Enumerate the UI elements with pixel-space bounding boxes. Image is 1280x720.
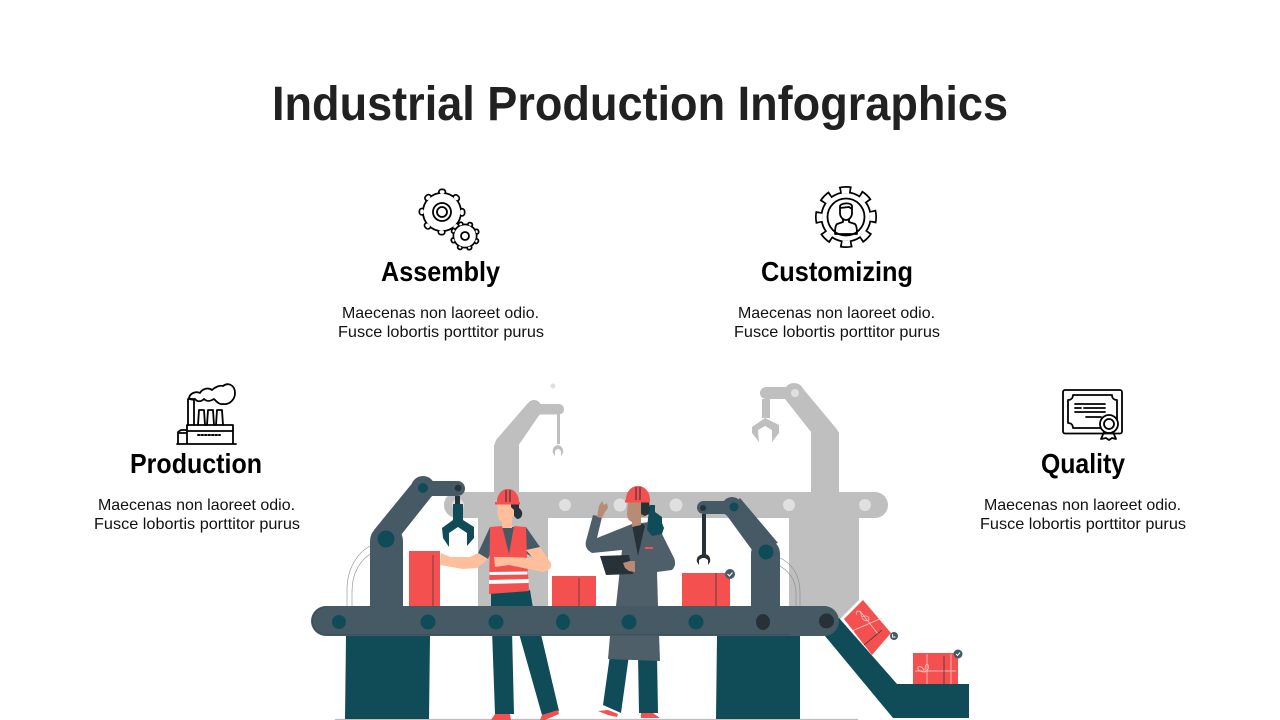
text: production description bbox=[94, 497, 300, 533]
text: quality description bbox=[980, 497, 1186, 533]
vest bbox=[489, 526, 529, 594]
shoes bbox=[598, 710, 660, 718]
left robot arm with claw bbox=[370, 476, 474, 606]
tablet bbox=[600, 555, 633, 575]
face bbox=[627, 501, 645, 527]
hair bbox=[511, 503, 522, 519]
worker: woman with tablet bbox=[586, 486, 675, 718]
coat bbox=[586, 515, 675, 661]
text: quality description: Maecenas non laoreet odio. bbox=[984, 497, 1181, 514]
text: production description: Maecenas non laoreet odio. bbox=[98, 497, 295, 514]
icon: factory bbox=[177, 384, 236, 444]
text: production description: Fusce lobortis porttitor purus bbox=[94, 516, 300, 533]
icon: gear with person bbox=[820, 190, 872, 244]
heading: production: Production bbox=[130, 448, 262, 479]
text: customizing description: Maecenas non laoreet odio. bbox=[738, 305, 935, 322]
text: assembly description bbox=[338, 305, 544, 341]
gift box on ramp base bbox=[913, 650, 962, 684]
text: assembly description: Fusce lobortis porttitor purus bbox=[338, 324, 544, 341]
panel: production bbox=[94, 384, 300, 533]
text: customizing description bbox=[734, 305, 940, 341]
shirt bbox=[478, 527, 540, 559]
inner shirt bbox=[632, 524, 645, 556]
folded arm bbox=[494, 547, 551, 572]
main conveyor belt bbox=[311, 606, 839, 636]
heading: assembly: Assembly bbox=[381, 256, 500, 287]
shoes bbox=[491, 710, 559, 720]
heading: quality: Quality bbox=[1041, 448, 1125, 479]
worker: man with safety vest bbox=[440, 489, 559, 720]
legs bbox=[491, 590, 559, 715]
background grey production line bbox=[444, 383, 888, 620]
legs bbox=[603, 655, 658, 713]
boxes on the conveyor bbox=[409, 551, 735, 606]
helmet bbox=[625, 486, 650, 502]
right robot arm with wrench bbox=[697, 497, 780, 606]
extended arm bbox=[440, 553, 488, 569]
ground line bbox=[335, 718, 858, 720]
hand on tablet bbox=[623, 561, 635, 572]
boxes with gift ribbon on ramp bbox=[825, 600, 969, 718]
title: Industrial Production Infographics bbox=[272, 78, 1008, 131]
ponytail bbox=[647, 505, 664, 536]
icon: gears bbox=[422, 192, 478, 248]
text: customizing description: Fusce lobortis porttitor purus bbox=[734, 324, 940, 341]
heading: customizing: Customizing bbox=[761, 256, 913, 287]
text: quality description: Fusce lobortis porttitor purus bbox=[980, 516, 1186, 533]
wires bbox=[347, 545, 800, 606]
raised hand bbox=[597, 501, 608, 518]
panel: customizing bbox=[734, 190, 940, 341]
panel: quality bbox=[980, 390, 1186, 533]
neck and face bbox=[498, 503, 514, 528]
text: assembly description: Maecenas non laoreet odio. bbox=[342, 305, 539, 322]
icon: certificate bbox=[1063, 390, 1122, 440]
helmet bbox=[495, 489, 520, 504]
illustration: factory production line bbox=[311, 383, 969, 720]
hair bbox=[641, 502, 650, 516]
conveyor support legs bbox=[345, 636, 800, 719]
panel: assembly bbox=[338, 192, 544, 341]
tilted gift box bbox=[844, 600, 898, 655]
